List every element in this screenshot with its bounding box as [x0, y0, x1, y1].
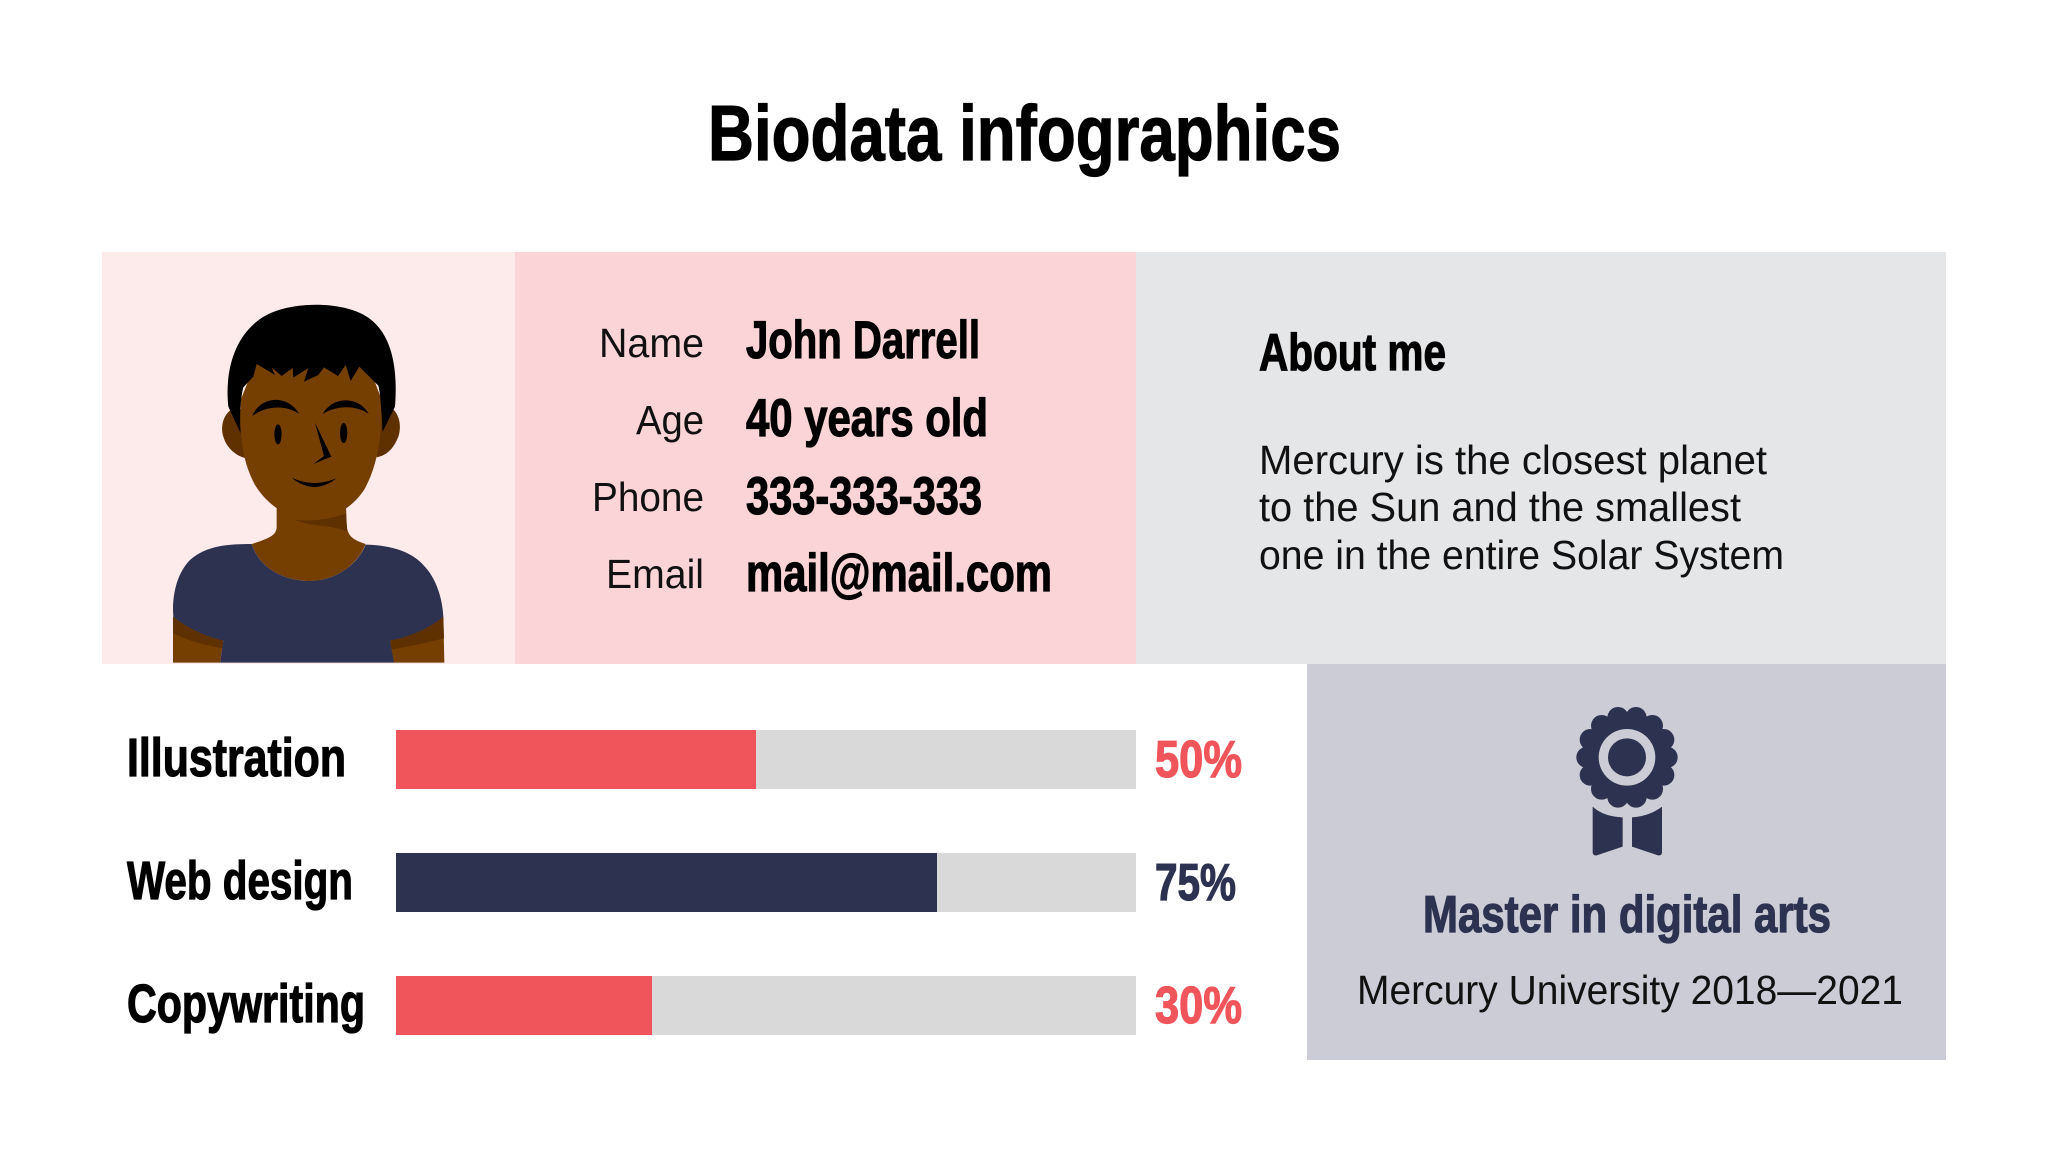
- about text: Mercury is the closest planet: [1259, 437, 1768, 483]
- text: university: Mercury University 2018—2021: [1357, 967, 1903, 1013]
- icon: award ribbon: [1576, 707, 1678, 855]
- value: name: John Darrell: [746, 311, 980, 370]
- skill: illustration: Illustration: [127, 728, 346, 788]
- value: phone: 333-333-333: [746, 467, 982, 526]
- skill: illustration: 50%: [1155, 731, 1242, 789]
- title: Biodata infographics: [708, 89, 1341, 177]
- heading: about me: About me: [1259, 324, 1446, 382]
- about text: one in the entire Solar System: [1259, 532, 1784, 578]
- label: phone: Phone: [592, 474, 704, 520]
- skill: copywriting: 30%: [1155, 977, 1242, 1035]
- skill: web design: 75%: [1155, 854, 1236, 912]
- panel: personal details: [515, 252, 1137, 664]
- value: age: 40 years old: [746, 389, 988, 448]
- skill: copywriting: [127, 974, 1242, 1035]
- skill: copywriting: Copywriting: [127, 974, 365, 1034]
- skill: web design: [127, 851, 1236, 912]
- heading: degree: Master in digital arts: [1423, 886, 1831, 944]
- panel: education: [1307, 664, 1946, 1060]
- about text: to the Sun and the smallest: [1259, 484, 1742, 530]
- skill: web design: Web design: [127, 851, 353, 911]
- skill: illustration: [127, 728, 1242, 789]
- bar chart: skills: [127, 728, 1242, 1035]
- label: email: Email: [606, 551, 704, 597]
- about text: [1259, 437, 1784, 578]
- value: email: mail@mail.com: [746, 544, 1052, 603]
- panel: about me: [1136, 252, 1946, 664]
- panel: portrait: [102, 252, 515, 664]
- label: age: Age: [636, 397, 704, 443]
- label: name: Name: [599, 320, 704, 366]
- icon: avatar: [173, 305, 444, 663]
